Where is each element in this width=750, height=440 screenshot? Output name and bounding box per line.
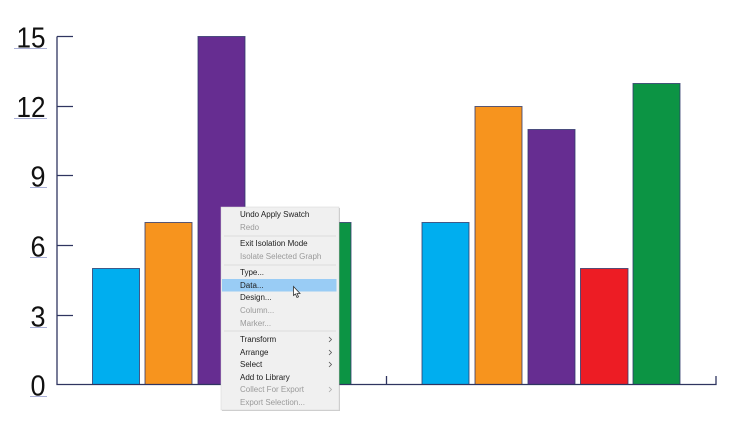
y-axis labels: 6	[30, 232, 46, 264]
context menu: Data...	[240, 281, 264, 290]
y-axis labels: 9	[30, 162, 46, 194]
context menu: Redo	[240, 223, 260, 232]
chart axes	[57, 36, 716, 384]
context menu: Column...	[240, 306, 274, 315]
y-axis labels: 0	[30, 370, 46, 402]
context menu: Exit Isolation Mode	[240, 239, 308, 248]
context menu: Transform	[240, 335, 276, 344]
context menu: Collect For Export	[240, 385, 305, 394]
y-axis labels: 15	[16, 22, 46, 54]
context menu: Select	[240, 360, 263, 369]
y-axis labels	[14, 22, 47, 402]
context menu: Undo Apply Swatch	[240, 210, 309, 219]
context menu: Add to Library	[240, 373, 290, 382]
icon: mouse cursor	[294, 286, 300, 298]
bar group 1	[92, 36, 351, 384]
bar group 2	[422, 84, 680, 384]
context menu: Arrange	[240, 348, 269, 357]
context menu: Design...	[240, 293, 272, 302]
y-axis labels: 12	[16, 92, 46, 124]
y-axis labels: 3	[30, 302, 46, 334]
context menu	[221, 207, 340, 411]
context menu: Export Selection...	[240, 398, 305, 407]
context menu: Type...	[240, 268, 264, 277]
context menu: Isolate Selected Graph	[240, 252, 321, 261]
context menu: Marker...	[240, 319, 271, 328]
